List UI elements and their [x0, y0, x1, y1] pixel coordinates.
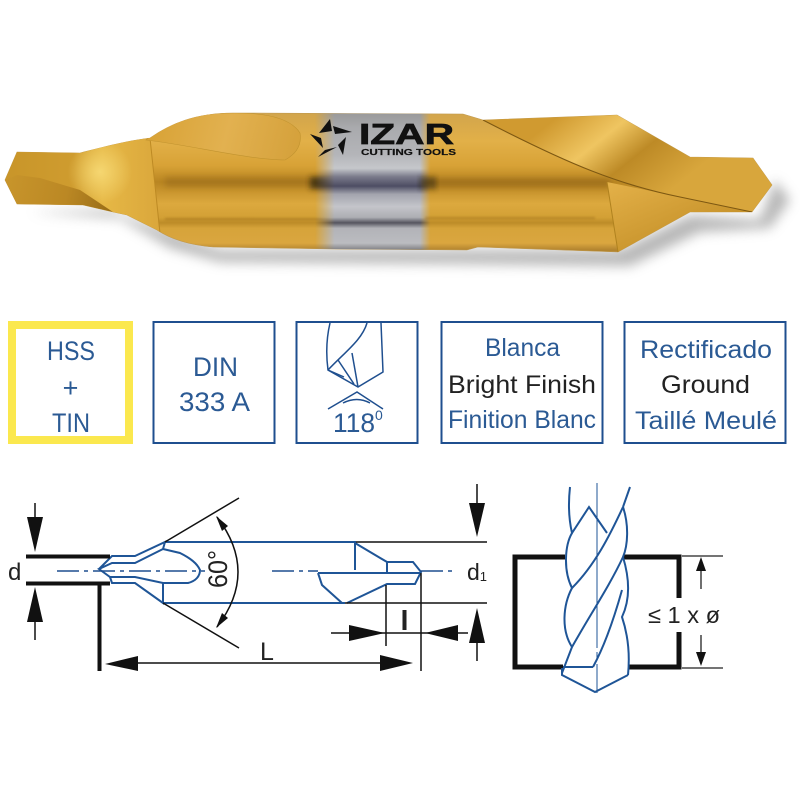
- grey band: [316, 114, 430, 250]
- box: ground: [624, 322, 786, 443]
- label: d1: 1: [480, 569, 487, 584]
- box: 118 degree point angle: 0: [375, 407, 383, 423]
- thick extension lines: [26, 556, 110, 671]
- drill bit photo: [0, 105, 790, 266]
- technical drawing: centre drill dimensions: [8, 484, 487, 671]
- brand logo: [310, 119, 456, 157]
- left cone edge: [150, 138, 160, 233]
- drill centre line: [596, 483, 598, 693]
- box: bright finish: Bright Finish: [448, 371, 596, 399]
- box: DIN 333 A: [154, 322, 274, 443]
- tool outline: [99, 542, 421, 603]
- box: 118 degree point angle: [296, 322, 418, 443]
- box: bright finish: Blanca: [485, 334, 560, 362]
- logo star: [310, 119, 352, 157]
- box: ground: Taillé Meulé: [635, 407, 777, 435]
- neck highlight: [72, 147, 126, 198]
- box: bright finish: Finition Blanc: [448, 406, 596, 434]
- box: ground: Rectificado: [640, 336, 772, 364]
- box: HSS + TIN: HSS: [47, 336, 95, 366]
- logo tagline: CUTTING TOOLS: [361, 147, 456, 157]
- label: L: L: [260, 638, 274, 666]
- box: HSS + TIN: TIN: [52, 408, 90, 438]
- dark band on body: [165, 177, 325, 187]
- drill body: [5, 113, 772, 252]
- box: HSS + TIN: +: [63, 373, 78, 403]
- centre line: [57, 570, 457, 572]
- label: d1: d: [467, 559, 480, 585]
- label: d: d: [8, 559, 21, 586]
- drill shadow: [30, 180, 790, 266]
- lower body streak: [165, 218, 330, 220]
- right cone: [607, 182, 752, 252]
- right flute: [483, 115, 772, 212]
- box: HSS + TIN: [12, 325, 129, 440]
- drill flutes: [562, 487, 630, 692]
- box: ground: Ground: [661, 371, 750, 399]
- technical drawing: hole depth: [515, 483, 723, 693]
- right body bands: [430, 178, 610, 188]
- dimension lines: [35, 484, 487, 671]
- hole outline: [515, 557, 679, 667]
- depth dimension: [648, 556, 723, 668]
- arrowheads: [27, 503, 485, 671]
- box: bright finish: [442, 322, 602, 443]
- label: 60 degrees: 60°: [203, 550, 233, 588]
- box: DIN 333 A: DIN: [193, 352, 238, 382]
- depth label: ≤ 1 x ø: [648, 602, 720, 628]
- box: DIN 333 A: 333 A: [179, 387, 250, 417]
- icon: drill point: [327, 323, 383, 409]
- left neck: [5, 138, 159, 232]
- left flute: [146, 113, 300, 160]
- angle label: 118: [333, 408, 375, 438]
- left tip facet: [14, 177, 113, 212]
- label: l: [402, 610, 406, 630]
- logo wordmark: IZAR: [359, 119, 454, 151]
